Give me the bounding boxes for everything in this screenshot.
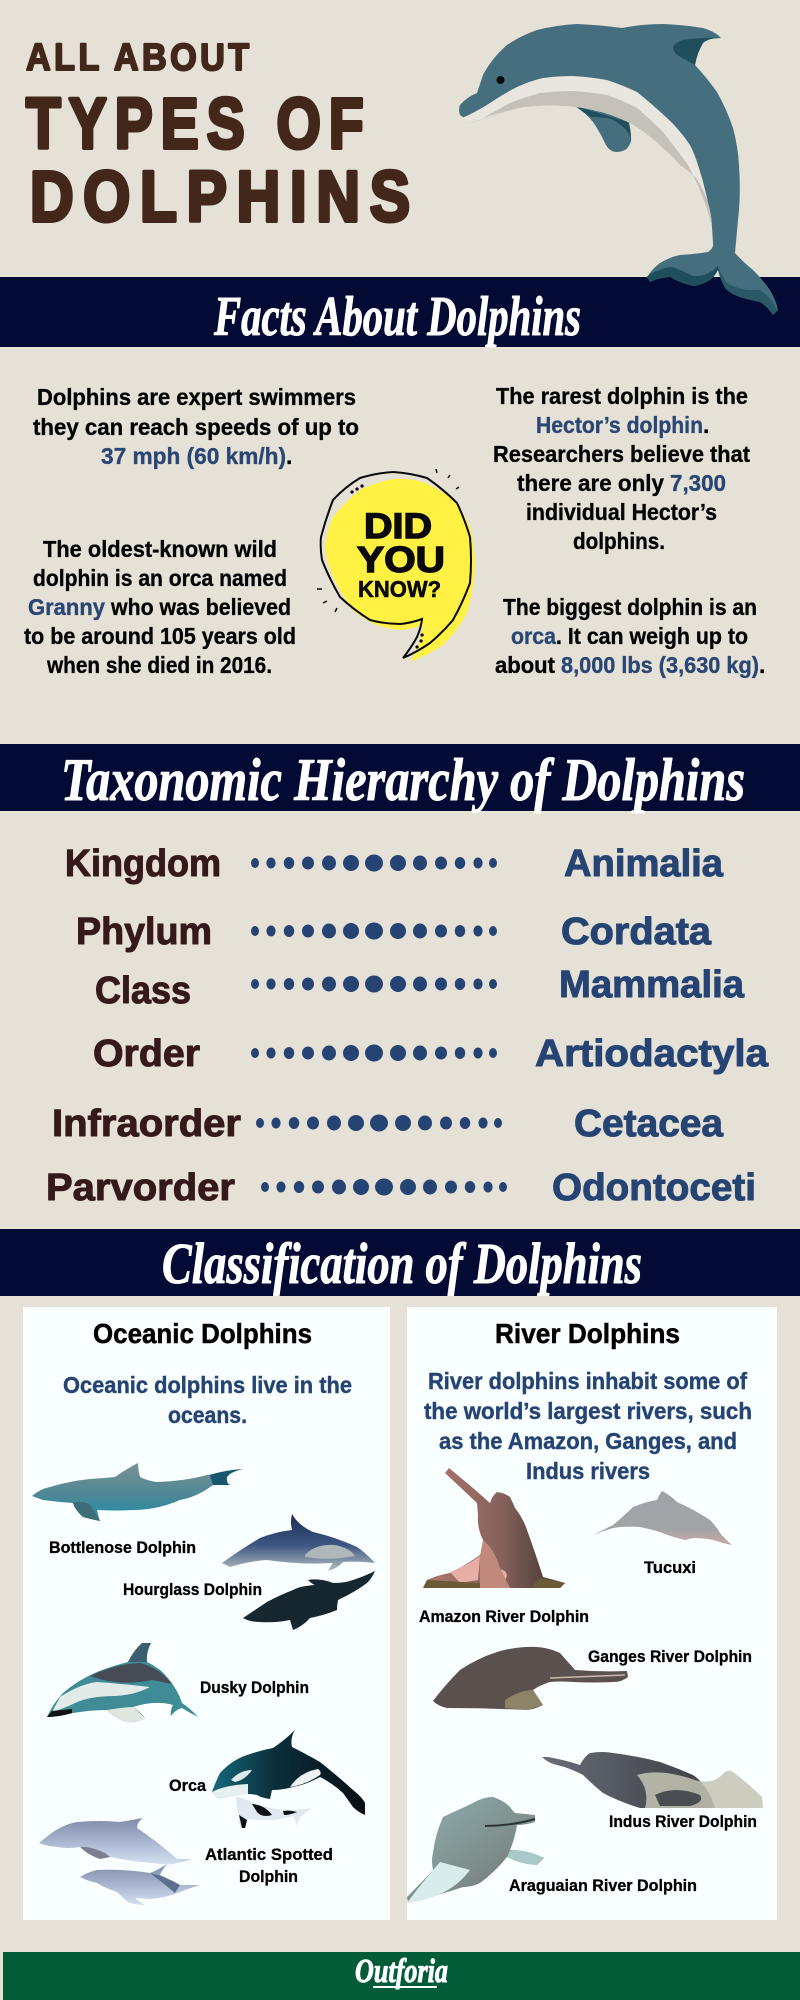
text: oceanic description: oceans. <box>168 1402 247 1428</box>
fact: swimming speed: 37 mph (60 km/h) <box>101 443 286 469</box>
fact: biggest dolphin: The biggest dolphin is an <box>503 594 757 620</box>
taxonomy row: infraorder <box>52 1103 724 1145</box>
heading: oceanic dolphins: Oceanic Dolphins <box>93 1318 312 1349</box>
taxonomy row: order: Order <box>93 1033 200 1075</box>
fact: rarest dolphin: dolphins. <box>573 528 665 554</box>
callout: did you know speech bubble: YOU <box>357 539 445 580</box>
text: river description <box>424 1368 752 1484</box>
icon: leaping dolphin <box>459 24 778 315</box>
fact: oldest wild dolphin: Granny <box>28 594 105 620</box>
label: hourglass dolphin: Hourglass Dolphin <box>123 1580 262 1599</box>
panel: river dolphins <box>407 1307 777 1920</box>
fact: oldest wild dolphin: dolphin is an orca named <box>33 565 287 591</box>
title: TYPES OF <box>26 84 364 163</box>
taxonomy row: infraorder: Infraorder <box>52 1103 241 1145</box>
image: orca with calf <box>212 1730 365 1828</box>
taxonomy row: class <box>95 964 745 1012</box>
fact: oldest wild dolphin: who was believed <box>110 594 291 620</box>
label: atlantic spotted dolphin: Atlantic Spotted <box>205 1845 333 1864</box>
fact: biggest dolphin: 8,000 lbs (3,630 kg) <box>561 652 759 678</box>
fact: rarest dolphin: The rarest dolphin is the <box>496 383 748 409</box>
fact: swimming speed: they can reach speeds of up to <box>33 414 359 440</box>
text: oceanic description: Oceanic dolphins live in the <box>63 1372 352 1398</box>
fact: rarest dolphin: individual Hector’s <box>526 499 717 525</box>
banner: classification of dolphins: Classification of Dolphins <box>162 1231 642 1296</box>
image: amazon river dolphin <box>423 1468 565 1588</box>
taxonomy row: phylum: Phylum <box>76 911 212 953</box>
image: common dolphin upper <box>222 1514 375 1571</box>
taxonomy row: parvorder: Parvorder <box>46 1167 235 1209</box>
fact: rarest dolphin: Researchers believe that <box>493 441 750 467</box>
label: amazon river dolphin: Amazon River Dolphin <box>419 1607 589 1626</box>
fact: oldest wild dolphin: to be around 105 years old <box>24 623 296 649</box>
label: indus river dolphin: Indus River Dolphin <box>609 1812 757 1831</box>
taxonomy row: kingdom: Animalia <box>564 843 724 885</box>
taxonomy row: kingdom: Kingdom <box>65 843 221 885</box>
fact: rarest dolphin: there are only <box>517 470 664 496</box>
fact: rarest dolphin: 7,300 <box>670 470 726 496</box>
taxonomy row: parvorder: Odontoceti <box>552 1167 756 1209</box>
fact: rarest dolphin <box>493 383 750 554</box>
fact: swimming speed: Dolphins are expert swimmers <box>37 384 356 410</box>
fact: swimming speed <box>33 384 359 469</box>
text: oceanic description <box>63 1372 352 1428</box>
fact: oldest wild dolphin: when she died in 2016. <box>46 652 272 678</box>
fact: biggest dolphin <box>495 594 765 678</box>
fact: rarest dolphin: . <box>703 412 709 438</box>
taxonomy row: class: Mammalia <box>559 964 745 1006</box>
title <box>26 35 410 236</box>
label: orca: Orca <box>169 1776 207 1795</box>
banner: facts about dolphins: Facts About Dolphins <box>213 286 581 348</box>
fact: oldest wild dolphin <box>24 536 296 678</box>
fact: swimming speed: . <box>286 443 292 469</box>
text: river description: Indus rivers <box>526 1458 650 1484</box>
taxonomy row: infraorder: Cetacea <box>574 1103 724 1145</box>
heading: river dolphins: River Dolphins <box>495 1318 680 1349</box>
text: river description: the world’s largest rivers, such <box>424 1398 752 1424</box>
image: ganges river dolphin <box>433 1647 628 1710</box>
callout: did you know speech bubble: DID <box>364 507 432 546</box>
fact: biggest dolphin: . <box>759 652 765 678</box>
label: dusky dolphin: Dusky Dolphin <box>200 1678 309 1697</box>
footer: outforia logo: Outforia <box>355 1953 448 1990</box>
taxonomy row: order <box>93 1033 769 1075</box>
label: araguaian river dolphin: Araguaian River Dolphin <box>509 1876 697 1895</box>
text: river description: as the Amazon, Ganges, and <box>439 1428 737 1454</box>
fact: rarest dolphin: Hector’s dolphin <box>536 412 703 438</box>
taxonomy row: parvorder <box>46 1167 756 1209</box>
label: atlantic spotted dolphin: Dolphin <box>239 1867 298 1886</box>
banner: facts about dolphins <box>0 277 800 348</box>
image: indus river dolphin <box>542 1752 763 1808</box>
label: ganges river dolphin: Ganges River Dolphin <box>588 1647 752 1666</box>
fact: biggest dolphin: about <box>495 652 555 678</box>
taxonomy row: phylum <box>76 911 712 953</box>
fact: oldest wild dolphin: The oldest-known wild <box>43 536 277 562</box>
panel: oceanic dolphins <box>23 1307 390 1920</box>
image: bottlenose dolphin <box>32 1463 243 1521</box>
text: river description: River dolphins inhabit some of <box>428 1368 747 1394</box>
title: DOLPHINS <box>30 156 410 236</box>
label: atlantic spotted dolphin <box>205 1845 333 1886</box>
title: ALL ABOUT <box>26 35 249 78</box>
fact: biggest dolphin: . It can weigh up to <box>556 623 748 649</box>
fact: biggest dolphin: orca <box>511 623 556 649</box>
image: dusky dolphin <box>47 1643 198 1722</box>
taxonomy row: class: Class <box>95 970 191 1012</box>
taxonomy row: kingdom <box>65 843 724 885</box>
callout: did you know speech bubble <box>317 469 475 662</box>
footer: outforia logo <box>3 1952 800 2000</box>
label: bottlenose dolphin: Bottlenose Dolphin <box>49 1538 196 1557</box>
image: atlantic spotted dolphins <box>39 1818 200 1905</box>
taxonomy row: order: Artiodactyla <box>535 1033 769 1075</box>
image: araguaian river dolphin <box>407 1797 544 1903</box>
taxonomy row: phylum: Cordata <box>561 911 712 953</box>
callout: did you know speech bubble: KNOW? <box>358 576 441 602</box>
image: tucuxi <box>593 1491 732 1545</box>
image: hourglass dolphin <box>243 1571 375 1630</box>
label: tucuxi: Tucuxi <box>644 1558 696 1577</box>
